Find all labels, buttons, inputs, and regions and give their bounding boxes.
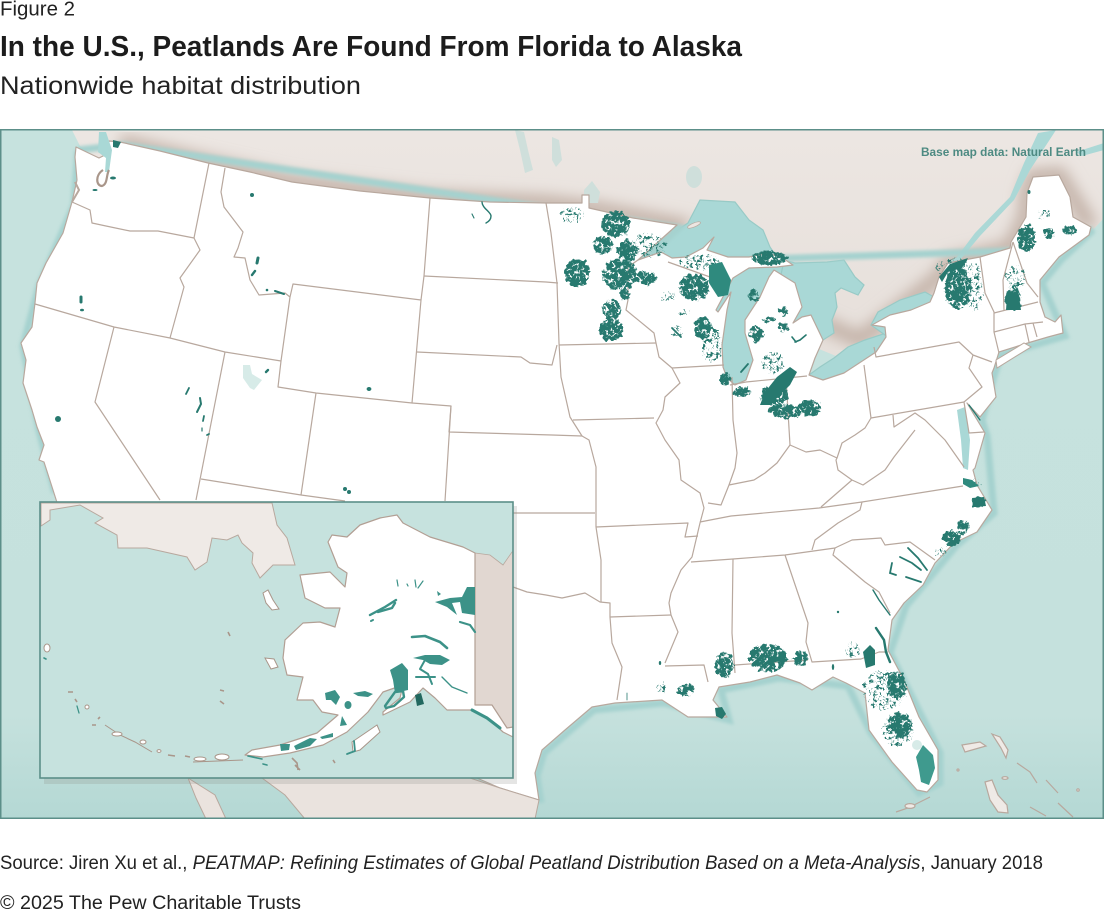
inset map: Alaska: [40, 502, 514, 778]
Isle Royale: [687, 221, 701, 229]
peatlands: dense clusters: [564, 211, 1077, 738]
Alaskan islands: [44, 590, 380, 770]
state boundaries: [35, 163, 1043, 700]
Lake Okeechobee: [912, 740, 922, 750]
inset land: Canada: [475, 552, 514, 728]
inset ocean: [40, 502, 513, 778]
Long Island: [996, 343, 1031, 368]
subtitle: Nationwide habitat distribution: [0, 72, 361, 100]
lake: Ontario: [871, 292, 936, 335]
Great Lakes: [638, 200, 936, 400]
St. Lawrence River: [948, 130, 1056, 263]
lake: Superior: [642, 199, 774, 258]
lake: Erie: [810, 334, 886, 380]
shading along the U.S.-Canada border: [120, 142, 1091, 340]
Alaska peatlands: [44, 580, 500, 765]
map panel: contiguous U.S.: [0, 129, 1104, 819]
Alaska: [245, 515, 513, 757]
Great Salt Lake: [243, 365, 262, 390]
lake: Michigan: [716, 267, 782, 384]
Florida: [888, 712, 912, 738]
coastal shadow: [23, 145, 1093, 803]
credit: base map: Base map data: Natural Earth: [921, 147, 1086, 159]
Everglades: [916, 745, 935, 785]
land: Mexico: [188, 778, 539, 819]
map border: [1, 130, 1103, 818]
Gulf Coast: [749, 644, 787, 672]
copyright: © 2025 The Pew Charitable Trusts: [0, 893, 301, 914]
inset border: [40, 502, 513, 778]
Minnesota: [602, 211, 630, 237]
Canadian inland lakes: [515, 130, 702, 203]
source note: Source: Jiren Xu et al., PEATMAP: Refining Estimates of Global Peatland Distribution Based on a Meta-Analysis, January 2018: [0, 853, 1043, 874]
land: Canada: [72, 130, 1104, 370]
peatlands: solid patches and river corridors: [55, 140, 1030, 719]
Wisconsin and Michigan: [635, 271, 657, 285]
Bahamas and Florida Keys: [896, 734, 1079, 817]
land: United States: [21, 141, 1091, 800]
title: In the U.S., Peatlands Are Found From Florida to Alaska: [0, 31, 743, 63]
ocean background: [0, 129, 1104, 819]
New York and New England: [945, 267, 971, 309]
inset shadow: [44, 506, 517, 784]
Ohio and Indiana: [761, 385, 789, 405]
North Carolina: [972, 497, 986, 507]
Puget Sound and Chesapeake Bay: [98, 132, 970, 470]
inset land: Russia: [41, 503, 295, 578]
peatlands: sparse clusters: [560, 207, 1051, 746]
lake: Huron: [780, 260, 865, 341]
